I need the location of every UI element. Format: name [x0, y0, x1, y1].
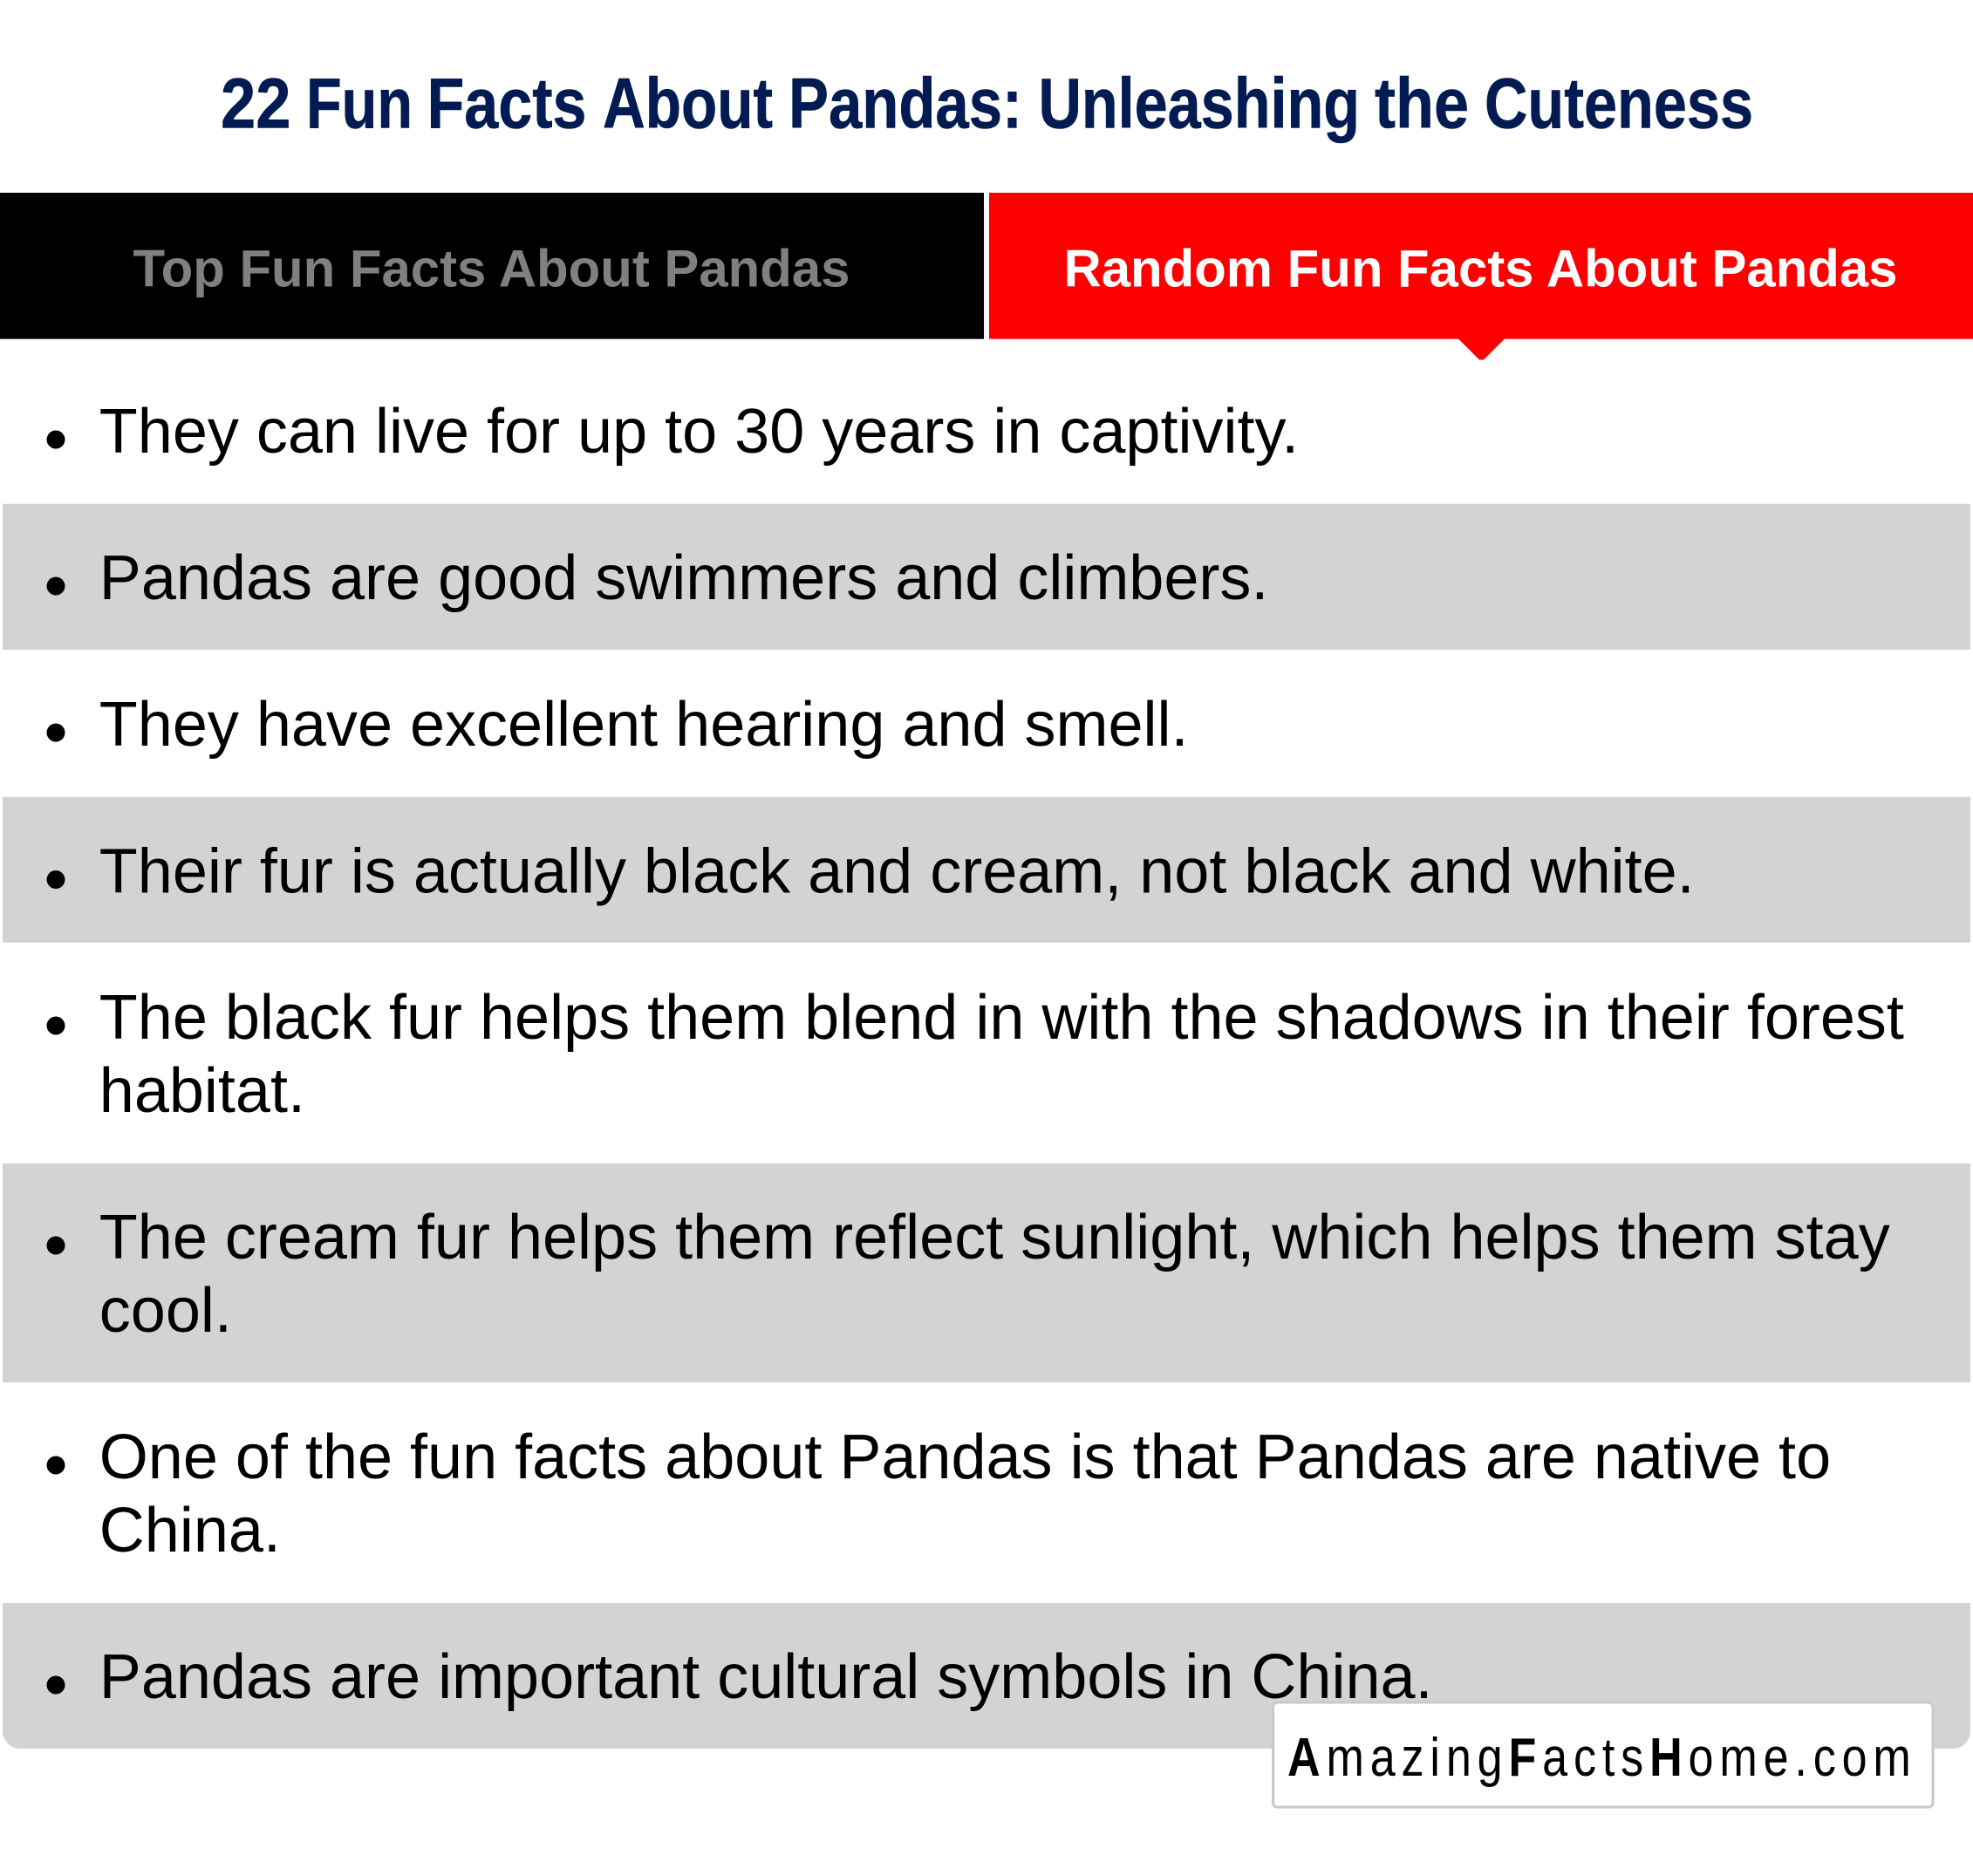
fact 4 [3, 797, 1970, 943]
tab: top fun facts (inactive): Top Fun Facts About Pandas [133, 239, 850, 298]
tab: random fun facts (active): Random Fun Facts About Pandas [1064, 239, 1898, 298]
title: Pandas: [789, 65, 1022, 144]
fact 7: One of the fun facts about Pandas is that Pandas are native to [99, 1422, 1831, 1492]
title: 22 [221, 65, 291, 144]
fact 5 [47, 983, 1904, 1126]
title: the [1375, 65, 1469, 144]
fact 3: They have excellent hearing and smell. [99, 690, 1189, 760]
title: About [603, 65, 773, 144]
tab: random fun facts (active) [989, 193, 1973, 359]
fact 7: China. [99, 1496, 281, 1566]
title [221, 65, 1753, 144]
fact 6: cool. [99, 1276, 232, 1346]
fact 8: Pandas are important cultural symbols in China. [99, 1642, 1433, 1712]
fact 1: They can live for up to 30 years in captivity. [99, 397, 1299, 467]
fact 2 [3, 504, 1970, 650]
fact 7 [47, 1422, 1831, 1566]
fact 2: Pandas are good swimmers and climbers. [99, 543, 1268, 613]
watermark badge [1273, 1702, 1933, 1807]
watermark badge: AmazingFactsHome.com [1287, 1728, 1911, 1788]
title: Facts [427, 65, 586, 144]
fact 6 [3, 1163, 1970, 1382]
title: Unleashing [1038, 65, 1360, 144]
fact 5: habitat. [99, 1056, 305, 1126]
fact 6: The cream fur helps them reflect sunlight, which helps them stay [99, 1203, 1890, 1272]
fact 4: Their fur is actually black and cream, not black and white. [99, 837, 1695, 907]
tab: top fun facts (inactive) [0, 193, 984, 339]
fact list [3, 397, 1970, 1749]
title: Cuteness [1485, 65, 1753, 144]
fact 8 [3, 1603, 1970, 1749]
title: Fun [306, 65, 413, 144]
fact 5: The black fur helps them blend in with the shadows in their forest [99, 983, 1904, 1053]
